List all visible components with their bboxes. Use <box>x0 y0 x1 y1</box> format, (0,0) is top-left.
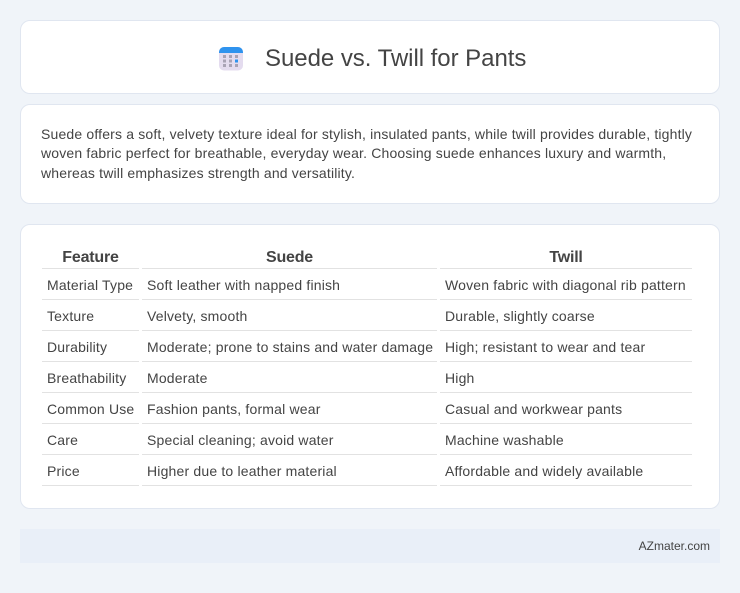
summary text: Suede offers a soft, velvety texture ideal for stylish, insulated pants, while twill provides durable, tightly <box>41 126 692 142</box>
comparison table: Soft leather with napped finish <box>147 277 340 293</box>
row: Care: Care <box>47 432 78 448</box>
summary text: whereas twill emphasizes strength and versatility. <box>41 165 355 181</box>
table panel <box>20 224 720 509</box>
comparison table: High <box>445 370 475 386</box>
footer text: AZmater.com: AZmater.com <box>639 539 710 553</box>
comparison table: Affordable and widely available <box>445 463 643 479</box>
header: Feature: Feature <box>62 249 119 266</box>
row: Common Use <box>42 393 139 424</box>
comparison table: High; resistant to wear and tear <box>445 339 645 355</box>
summary text <box>41 126 692 181</box>
row: Price <box>42 455 139 486</box>
row: Care <box>42 424 139 455</box>
comparison table: Fashion pants, formal wear <box>147 401 321 417</box>
footer bar <box>20 529 720 563</box>
comparison table <box>42 249 692 486</box>
row: Breathability <box>42 362 139 393</box>
comparison table: Woven fabric with diagonal rib pattern <box>445 277 686 293</box>
header: Twill: Twill <box>549 249 583 266</box>
comparison table: Machine washable <box>445 432 564 448</box>
row: Material Type <box>42 269 139 300</box>
row: Common Use: Common Use <box>47 401 134 417</box>
row: Durability <box>42 331 139 362</box>
icon: calendar <box>219 47 243 70</box>
row: Breathability: Breathability <box>47 370 126 386</box>
row: Material Type: Material Type <box>47 277 133 293</box>
row: Durability: Durability <box>47 339 107 355</box>
comparison table: Casual and workwear pants <box>445 401 622 417</box>
row: Texture: Texture <box>47 308 94 324</box>
title panel <box>20 20 720 94</box>
title: Suede vs. Twill for Pants <box>265 45 526 72</box>
comparison table: Moderate; prone to stains and water damage <box>147 339 433 355</box>
row: Texture <box>42 300 139 331</box>
comparison table: Moderate <box>147 370 208 386</box>
summary text: woven fabric perfect for breathable, everyday wear. Choosing suede enhances luxury and warmth, <box>41 145 666 161</box>
comparison table: Higher due to leather material <box>147 463 337 479</box>
comparison table: Durable, slightly coarse <box>445 308 595 324</box>
comparison table: Special cleaning; avoid water <box>147 432 334 448</box>
row: Price: Price <box>47 463 80 479</box>
summary panel <box>20 104 720 204</box>
comparison table: Velvety, smooth <box>147 308 248 324</box>
header: Suede: Suede <box>266 249 313 266</box>
